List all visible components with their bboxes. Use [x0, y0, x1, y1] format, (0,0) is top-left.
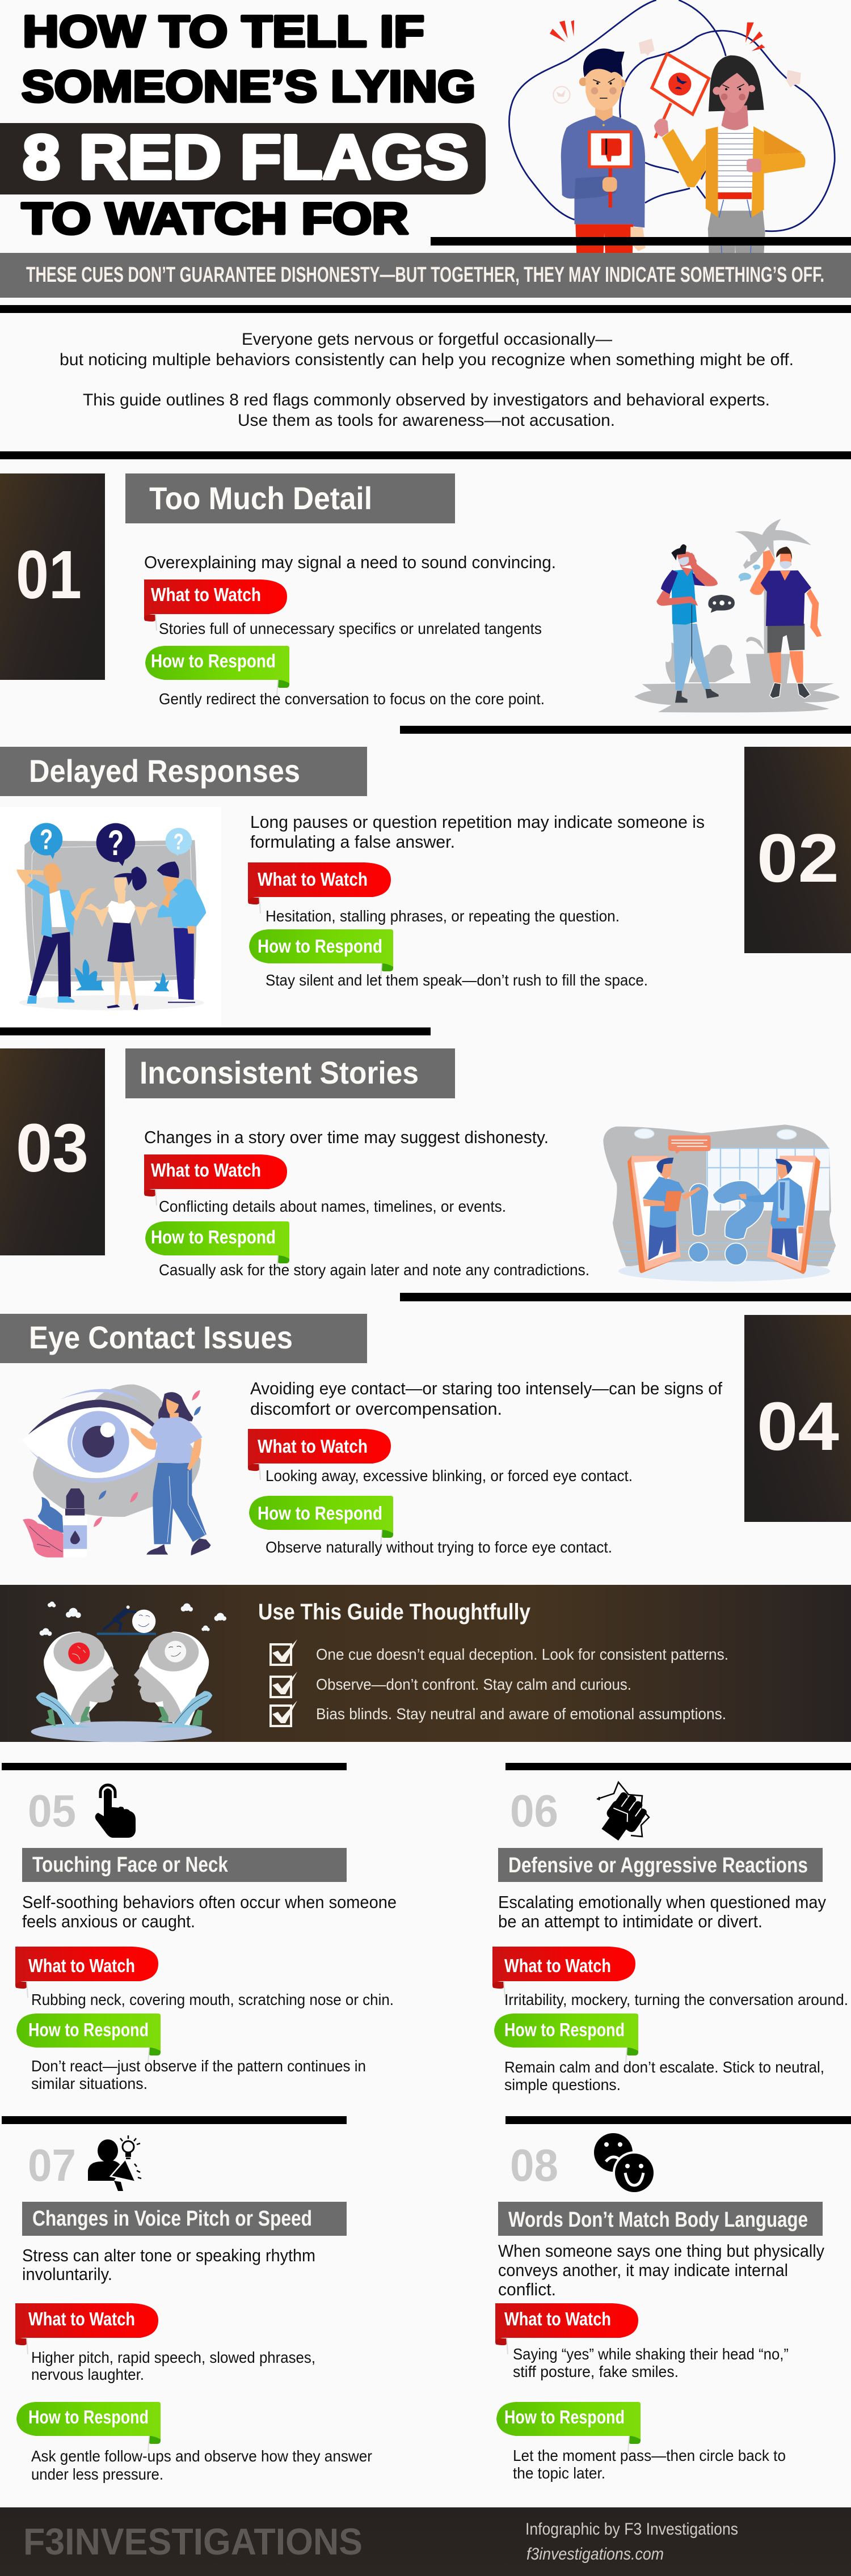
illustration: two masked people talking [634, 519, 840, 712]
description 06: Escalating emotionally when questioned may [498, 1892, 826, 1912]
guide heading: Use This Guide Thoughtfully [258, 1600, 531, 1625]
footer [0, 2507, 851, 2576]
respond text 08: the topic later. [513, 2464, 605, 2482]
intro text: Use them as tools for awareness—not accusation. [238, 411, 615, 430]
what to watch 04: What to Watch [258, 1436, 368, 1457]
what to watch 08: What to Watch [504, 2308, 611, 2329]
respond text 07 [31, 2447, 372, 2483]
respond text 05 [31, 2057, 366, 2092]
panel: use this guide thoughtfully [0, 1585, 851, 1742]
description 03: Changes in a story over time may suggest dishonesty. [144, 1127, 549, 1147]
intro text [60, 330, 794, 430]
description 05 [22, 1892, 397, 1931]
watch text 02: Hesitation, stalling phrases, or repeating the question. [266, 907, 620, 925]
heading 06 [498, 1848, 823, 1882]
watch text 01: Stories full of unnecessary specifics or unrelated tangents [159, 620, 542, 637]
heading 02: Delayed Responses [29, 753, 300, 789]
description 02: Long pauses or question repetition may indicate someone is [250, 812, 705, 832]
heading 04 [0, 1314, 367, 1363]
description 07 [22, 2245, 315, 2284]
panel: 08 words don't match body language [495, 2133, 824, 2482]
number 03 [0, 1048, 105, 1255]
description 08 [498, 2241, 824, 2299]
leaves plant [38, 1497, 64, 1533]
heading 05: Touching Face or Neck [32, 1853, 229, 1877]
illustration: big eye and woman [22, 1385, 211, 1558]
what to watch 05 [15, 1947, 158, 1998]
panel: 02 delayed responses [0, 747, 851, 1027]
description 06 [498, 1892, 826, 1931]
respond text 07: Ask gentle follow-ups and observe how they answer [31, 2447, 372, 2465]
how to respond 05: How to Respond [28, 2019, 149, 2040]
description 08: conveys another, it may indicate internal [498, 2260, 788, 2280]
watch text 07: nervous laughter. [31, 2366, 144, 2383]
illustration: three people with question bubbles: ? [40, 823, 53, 855]
illustration: two men in phones with question marks [603, 1124, 836, 1281]
description 06: be an attempt to intimidate or divert. [498, 1911, 762, 1931]
watch text 07 [31, 2349, 315, 2383]
description 05: feels anxious or caught. [22, 1911, 195, 1931]
heading 03 [125, 1048, 455, 1098]
description 08: conflict. [498, 2279, 556, 2299]
what to watch 06 [492, 1947, 635, 1998]
icon: sad and happy faces [594, 2133, 656, 2194]
how to respond 02 [249, 929, 393, 979]
man left in phone [648, 1225, 676, 1260]
how to respond 04 [249, 1496, 393, 1546]
bottle [64, 1516, 87, 1558]
icon: person with megaphone and bulb [88, 2135, 141, 2191]
description 01: Overexplaining may signal a need to sound convincing. [144, 552, 556, 572]
checklist item 2 [271, 1672, 631, 1697]
footer website: f3investigations.com [526, 2545, 664, 2564]
heading 03: Inconsistent Stories [140, 1055, 419, 1090]
black bar [431, 237, 851, 246]
respond text 08 [513, 2447, 786, 2482]
respond text 05: Don’t react—just observe if the pattern continues in [31, 2057, 366, 2075]
what to watch 07: What to Watch [28, 2308, 135, 2329]
how to respond 01 [145, 646, 289, 696]
what to watch 02: What to Watch [258, 869, 368, 890]
number 01: 01 [16, 536, 82, 613]
man left [673, 624, 710, 691]
how to respond 06: How to Respond [504, 2019, 625, 2040]
intro text: but noticing multiple behaviors consistently can help you recognize when something might be off. [60, 350, 794, 369]
title [0, 6, 486, 243]
man right in phone [772, 1225, 798, 1260]
description 04: discomfort or overcompensation. [250, 1399, 502, 1419]
woman [146, 1538, 211, 1555]
checklist item 1 [271, 1639, 728, 1665]
how to respond 05 [16, 2014, 161, 2063]
title: SOMEONE’S LYING [22, 61, 475, 111]
divider bars [2, 1763, 851, 1770]
divider bar [400, 1293, 851, 1301]
illustration: three people with question bubbles [0, 807, 221, 1027]
divider bars [2, 2116, 851, 2124]
what to watch 02 [248, 862, 391, 913]
heading 07 [22, 2202, 347, 2236]
description 08: When someone says one thing but physically [498, 2241, 824, 2261]
divider bar [400, 726, 851, 734]
respond text 06 [504, 2058, 824, 2093]
number 02: 02 [757, 819, 839, 896]
respond text 06: Remain calm and don’t escalate. Stick to neutral, [504, 2058, 824, 2076]
number 04 [744, 1315, 851, 1522]
description 02: formulating a false answer. [250, 832, 455, 852]
panel: 07 changes in voice pitch or speed [15, 2135, 372, 2483]
respond text 07: under less pressure. [31, 2465, 163, 2483]
number 06: 06 [510, 1786, 558, 1836]
number 07: 07 [28, 2140, 76, 2190]
how to respond 06 [494, 2014, 638, 2063]
description 07: Stress can alter tone or speaking rhythm [22, 2245, 315, 2265]
footer credit: Infographic by F3 Investigations [525, 2520, 738, 2539]
description 04 [250, 1378, 722, 1419]
heading 05 [22, 1848, 347, 1882]
checklist item 3: Bias blinds. Stay neutral and aware of emotional assumptions. [316, 1705, 726, 1723]
what to watch 03 [144, 1154, 287, 1205]
panel: 05 touching face or neck [15, 1785, 397, 2092]
man right [769, 651, 803, 683]
icon: fist [597, 1782, 651, 1845]
title: HOW TO TELL IF [23, 6, 424, 56]
number 02 [744, 747, 851, 953]
panel: 06 defensive or aggressive reactions [492, 1782, 848, 2093]
what to watch 07 [15, 2303, 158, 2354]
how to respond 07 [16, 2402, 161, 2452]
illustration: two heads facing each other [31, 1601, 226, 1742]
what to watch 04 [248, 1429, 391, 1480]
footer logo: F3INVESTIGATIONS [23, 2520, 363, 2562]
description 05: Self-soothing behaviors often occur when someone [22, 1892, 397, 1912]
respond text 06: simple questions. [504, 2076, 621, 2093]
respond text 03: Casually ask for the story again later and note any contradictions. [159, 1261, 589, 1279]
man [575, 224, 633, 281]
heading 07: Changes in Voice Pitch or Speed [32, 2207, 312, 2231]
heading 02 [0, 747, 367, 796]
watch text 08: stiff posture, fake smiles. [513, 2363, 679, 2380]
number 08: 08 [510, 2140, 558, 2190]
respond text 05: similar situations. [31, 2075, 148, 2092]
respond text 08: Let the moment pass—then circle back to [513, 2447, 786, 2464]
heading 01: Too Much Detail [149, 480, 372, 516]
exclamation and question [690, 1183, 709, 1236]
panel: 03 inconsistent stories [0, 1048, 836, 1281]
heading 04: Eye Contact Issues [29, 1319, 293, 1355]
how to respond 02: How to Respond [258, 936, 382, 957]
intro text: Everyone gets nervous or forgetful occasionally— [242, 330, 612, 349]
checklist item 1: One cue doesn’t equal deception. Look for consistent patterns. [316, 1646, 728, 1663]
illustration: three people with question bubbles: ? [108, 823, 124, 863]
watch text 04: Looking away, excessive blinking, or forced eye contact. [266, 1467, 633, 1484]
number 04: 04 [757, 1388, 839, 1465]
what to watch 01: What to Watch [151, 584, 261, 605]
number 01 [0, 473, 105, 680]
checklist item 3 [271, 1701, 726, 1726]
checklist item 2: Observe—don’t confront. Stay calm and curious. [316, 1676, 631, 1693]
how to respond 08: How to Respond [504, 2406, 625, 2427]
panel: 01 too much detail [0, 473, 840, 712]
woman [708, 211, 765, 281]
drops and leaves [94, 1390, 200, 1527]
illustration: three people with question bubbles: ? [174, 830, 184, 855]
panel: 04 eye contact issues [0, 1314, 851, 1558]
what to watch 05: What to Watch [28, 1955, 135, 1976]
how to respond 04: How to Respond [258, 1503, 382, 1524]
heading 08 [498, 2202, 823, 2236]
woman [113, 962, 137, 1006]
title banner: 8 red flags: 8 RED FLAGS [23, 122, 469, 192]
how to respond 07: How to Respond [28, 2406, 149, 2427]
divider bar [0, 1027, 431, 1035]
how to respond 03: How to Respond [151, 1226, 276, 1247]
number 05: 05 [28, 1786, 76, 1836]
what to watch 08 [495, 2303, 638, 2354]
what to watch 06: What to Watch [504, 1955, 611, 1976]
how to respond 03 [145, 1221, 289, 1271]
hero illustration: man and woman holding signs [509, 0, 835, 281]
watch text 05: Rubbing neck, covering mouth, scratching nose or chin. [31, 1991, 394, 2008]
watch text 03: Conflicting details about names, timelines, or events. [159, 1198, 506, 1215]
watch text 08: Saying “yes” while shaking their head “no,” [513, 2345, 789, 2363]
title: TO WATCH FOR [22, 193, 408, 243]
what to watch 01 [144, 580, 287, 631]
number 03: 03 [16, 1109, 89, 1186]
heading 01 [125, 473, 455, 523]
watch text 07: Higher pitch, rapid speech, slowed phrases, [31, 2349, 315, 2366]
description 07: involuntarily. [22, 2264, 112, 2284]
description 02 [250, 812, 705, 852]
how to respond 08 [496, 2402, 641, 2452]
icon: pointing hand [95, 1785, 136, 1838]
respond text 04: Observe naturally without trying to force eye contact. [266, 1538, 612, 1556]
respond text 02: Stay silent and let them speak—don’t rush to fill the space. [266, 971, 648, 989]
watch text 08 [513, 2345, 789, 2380]
what to watch 03: What to Watch [151, 1160, 261, 1181]
intro text: This guide outlines 8 red flags commonly observed by investigators and behavioral experts. [83, 391, 770, 409]
subtitle banner [0, 253, 851, 298]
description 04: Avoiding eye contact—or staring too intensely—can be signs of [250, 1378, 722, 1398]
how to respond 01: How to Respond [151, 650, 276, 671]
respond text 01: Gently redirect the conversation to focus on the core point. [159, 690, 545, 708]
man 3 [174, 928, 194, 1000]
man 1 [30, 932, 71, 997]
